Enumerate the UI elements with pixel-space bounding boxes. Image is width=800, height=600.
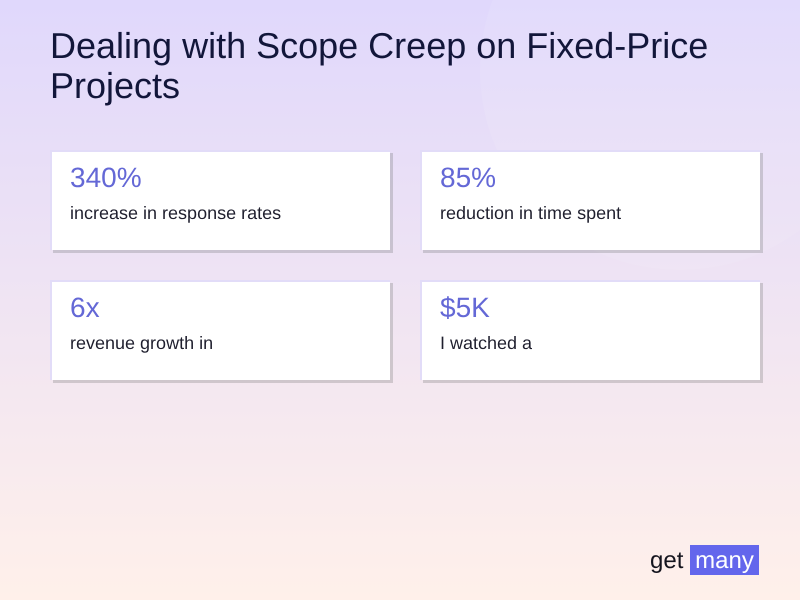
card: 85% [420, 150, 760, 250]
card: $5K [420, 280, 760, 380]
stat: 85%: 85% [440, 162, 496, 193]
card: 340% [50, 150, 390, 250]
background circle [480, 0, 800, 270]
label: time spent: reduction in time spent [440, 203, 621, 223]
logo: getmany [650, 545, 759, 575]
stat: 6x: 6x [70, 292, 100, 323]
logo badge: many: many [695, 547, 754, 574]
label: response rates: increase in response rates [70, 203, 281, 223]
logo word: get: get [650, 547, 683, 574]
label: revenue growth: revenue growth in [70, 333, 213, 353]
stat: $5K: $5K [440, 292, 490, 323]
title: Dealing with Scope Creep on Fixed-Price Projects [50, 25, 708, 106]
stat: 340%: 340% [70, 162, 142, 193]
card: 6x [50, 280, 390, 380]
label: I watched a: I watched a [440, 333, 532, 353]
